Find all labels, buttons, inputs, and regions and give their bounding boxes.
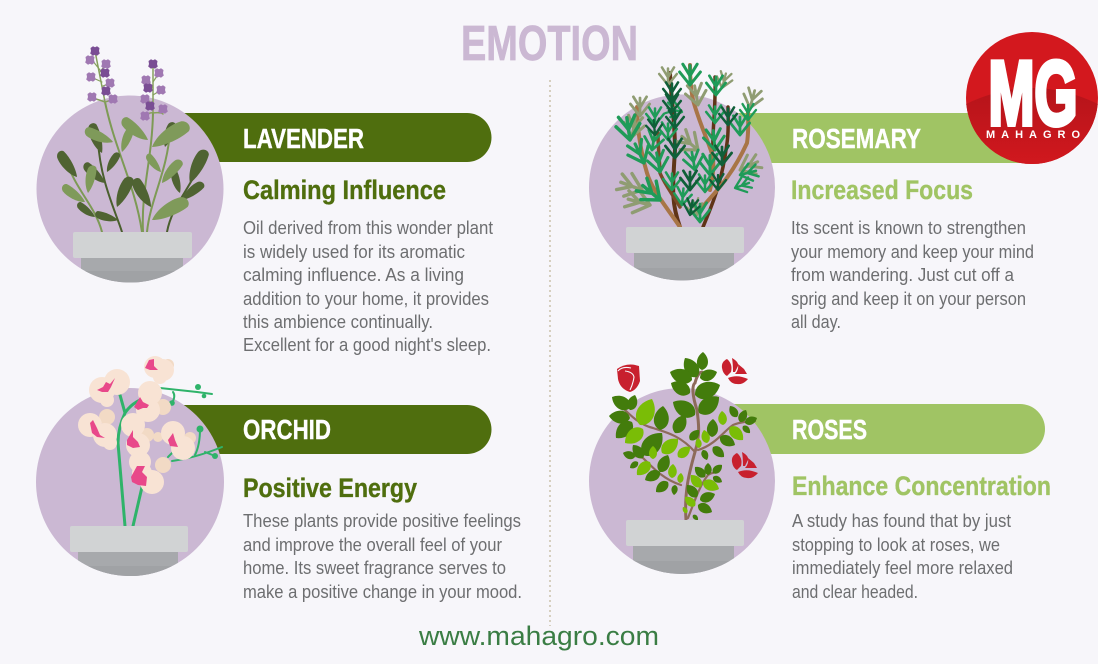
lavender description: is widely used for its aromatic xyxy=(243,242,465,262)
icon: rose bush xyxy=(608,352,759,522)
rosemary description: all day. xyxy=(791,312,841,332)
rosemary banner xyxy=(720,113,1020,163)
orchid pot xyxy=(70,526,188,576)
icon: rose bud xyxy=(617,365,640,392)
icon: rose flower right xyxy=(732,452,758,478)
lavender circle xyxy=(36,96,224,282)
roses description: and clear headed. xyxy=(792,582,918,602)
rosemary description: from wandering. Just cut off a xyxy=(791,265,1015,285)
rosemary description: Its scent is known to strengthen xyxy=(791,218,1026,238)
panel: lavender xyxy=(36,46,493,355)
orchid heading: ORCHID xyxy=(243,414,331,445)
rosemary description: sprig and keep it on your person xyxy=(791,289,1026,309)
roses description: A study has found that by just xyxy=(792,511,1011,531)
roses description: stopping to look at roses, we xyxy=(792,535,1000,555)
orchid banner xyxy=(170,405,492,454)
lavender banner xyxy=(170,113,492,162)
orchid description: home. Its sweet fragrance serves to xyxy=(243,558,506,578)
lavender description xyxy=(243,218,493,355)
roses heading: ROSES xyxy=(792,414,867,445)
lavender subheading: Calming Influence xyxy=(243,175,446,205)
rosemary heading: ROSEMARY xyxy=(792,123,921,154)
orchid description: and improve the overall feel of your xyxy=(243,535,502,555)
orchid description: make a positive change in your mood. xyxy=(243,582,522,602)
logo: Mahagro xyxy=(966,32,1098,170)
roses circle xyxy=(589,388,775,574)
orchid description xyxy=(243,511,522,602)
lavender description: calming influence. As a living xyxy=(243,265,464,285)
lavender description: Excellent for a good night's sleep. xyxy=(243,335,491,355)
roses banner xyxy=(720,404,1045,454)
rosemary description: your memory and keep your mind xyxy=(791,242,1034,262)
orchid description: These plants provide positive feelings xyxy=(243,511,521,531)
orchid subheading: Positive Energy xyxy=(243,473,417,503)
rosemary subheading: Increased Focus xyxy=(791,175,973,205)
panel: orchid xyxy=(36,356,522,602)
logo: Mahagro: MAHAGRO xyxy=(986,129,1080,141)
orchid circle xyxy=(36,388,224,576)
roses subheading: Enhance Concentration xyxy=(792,471,1051,501)
lavender description: addition to your home, it provides xyxy=(243,289,489,309)
website url: www.mahagro.com xyxy=(418,621,659,651)
icon: rose flower top xyxy=(722,358,748,384)
lavender pot xyxy=(73,232,192,282)
rosemary pot xyxy=(625,227,745,283)
rosemary description xyxy=(791,218,1034,332)
roses description: immediately feel more relaxed xyxy=(792,558,1013,578)
roses pot xyxy=(625,520,745,576)
icon: lavender plant xyxy=(55,46,211,232)
lavender description: Oil derived from this wonder plant xyxy=(243,218,493,238)
lavender description: this ambience continually. xyxy=(243,312,433,332)
lavender heading: LAVENDER xyxy=(243,123,364,154)
panel: rosemary xyxy=(589,64,1034,332)
rosemary circle xyxy=(589,94,775,280)
roses description xyxy=(792,511,1013,602)
icon: rosemary plant xyxy=(615,64,764,227)
panel: roses xyxy=(589,352,1051,602)
title: EMOTION xyxy=(461,17,638,71)
icon: orchid plant xyxy=(78,356,222,526)
